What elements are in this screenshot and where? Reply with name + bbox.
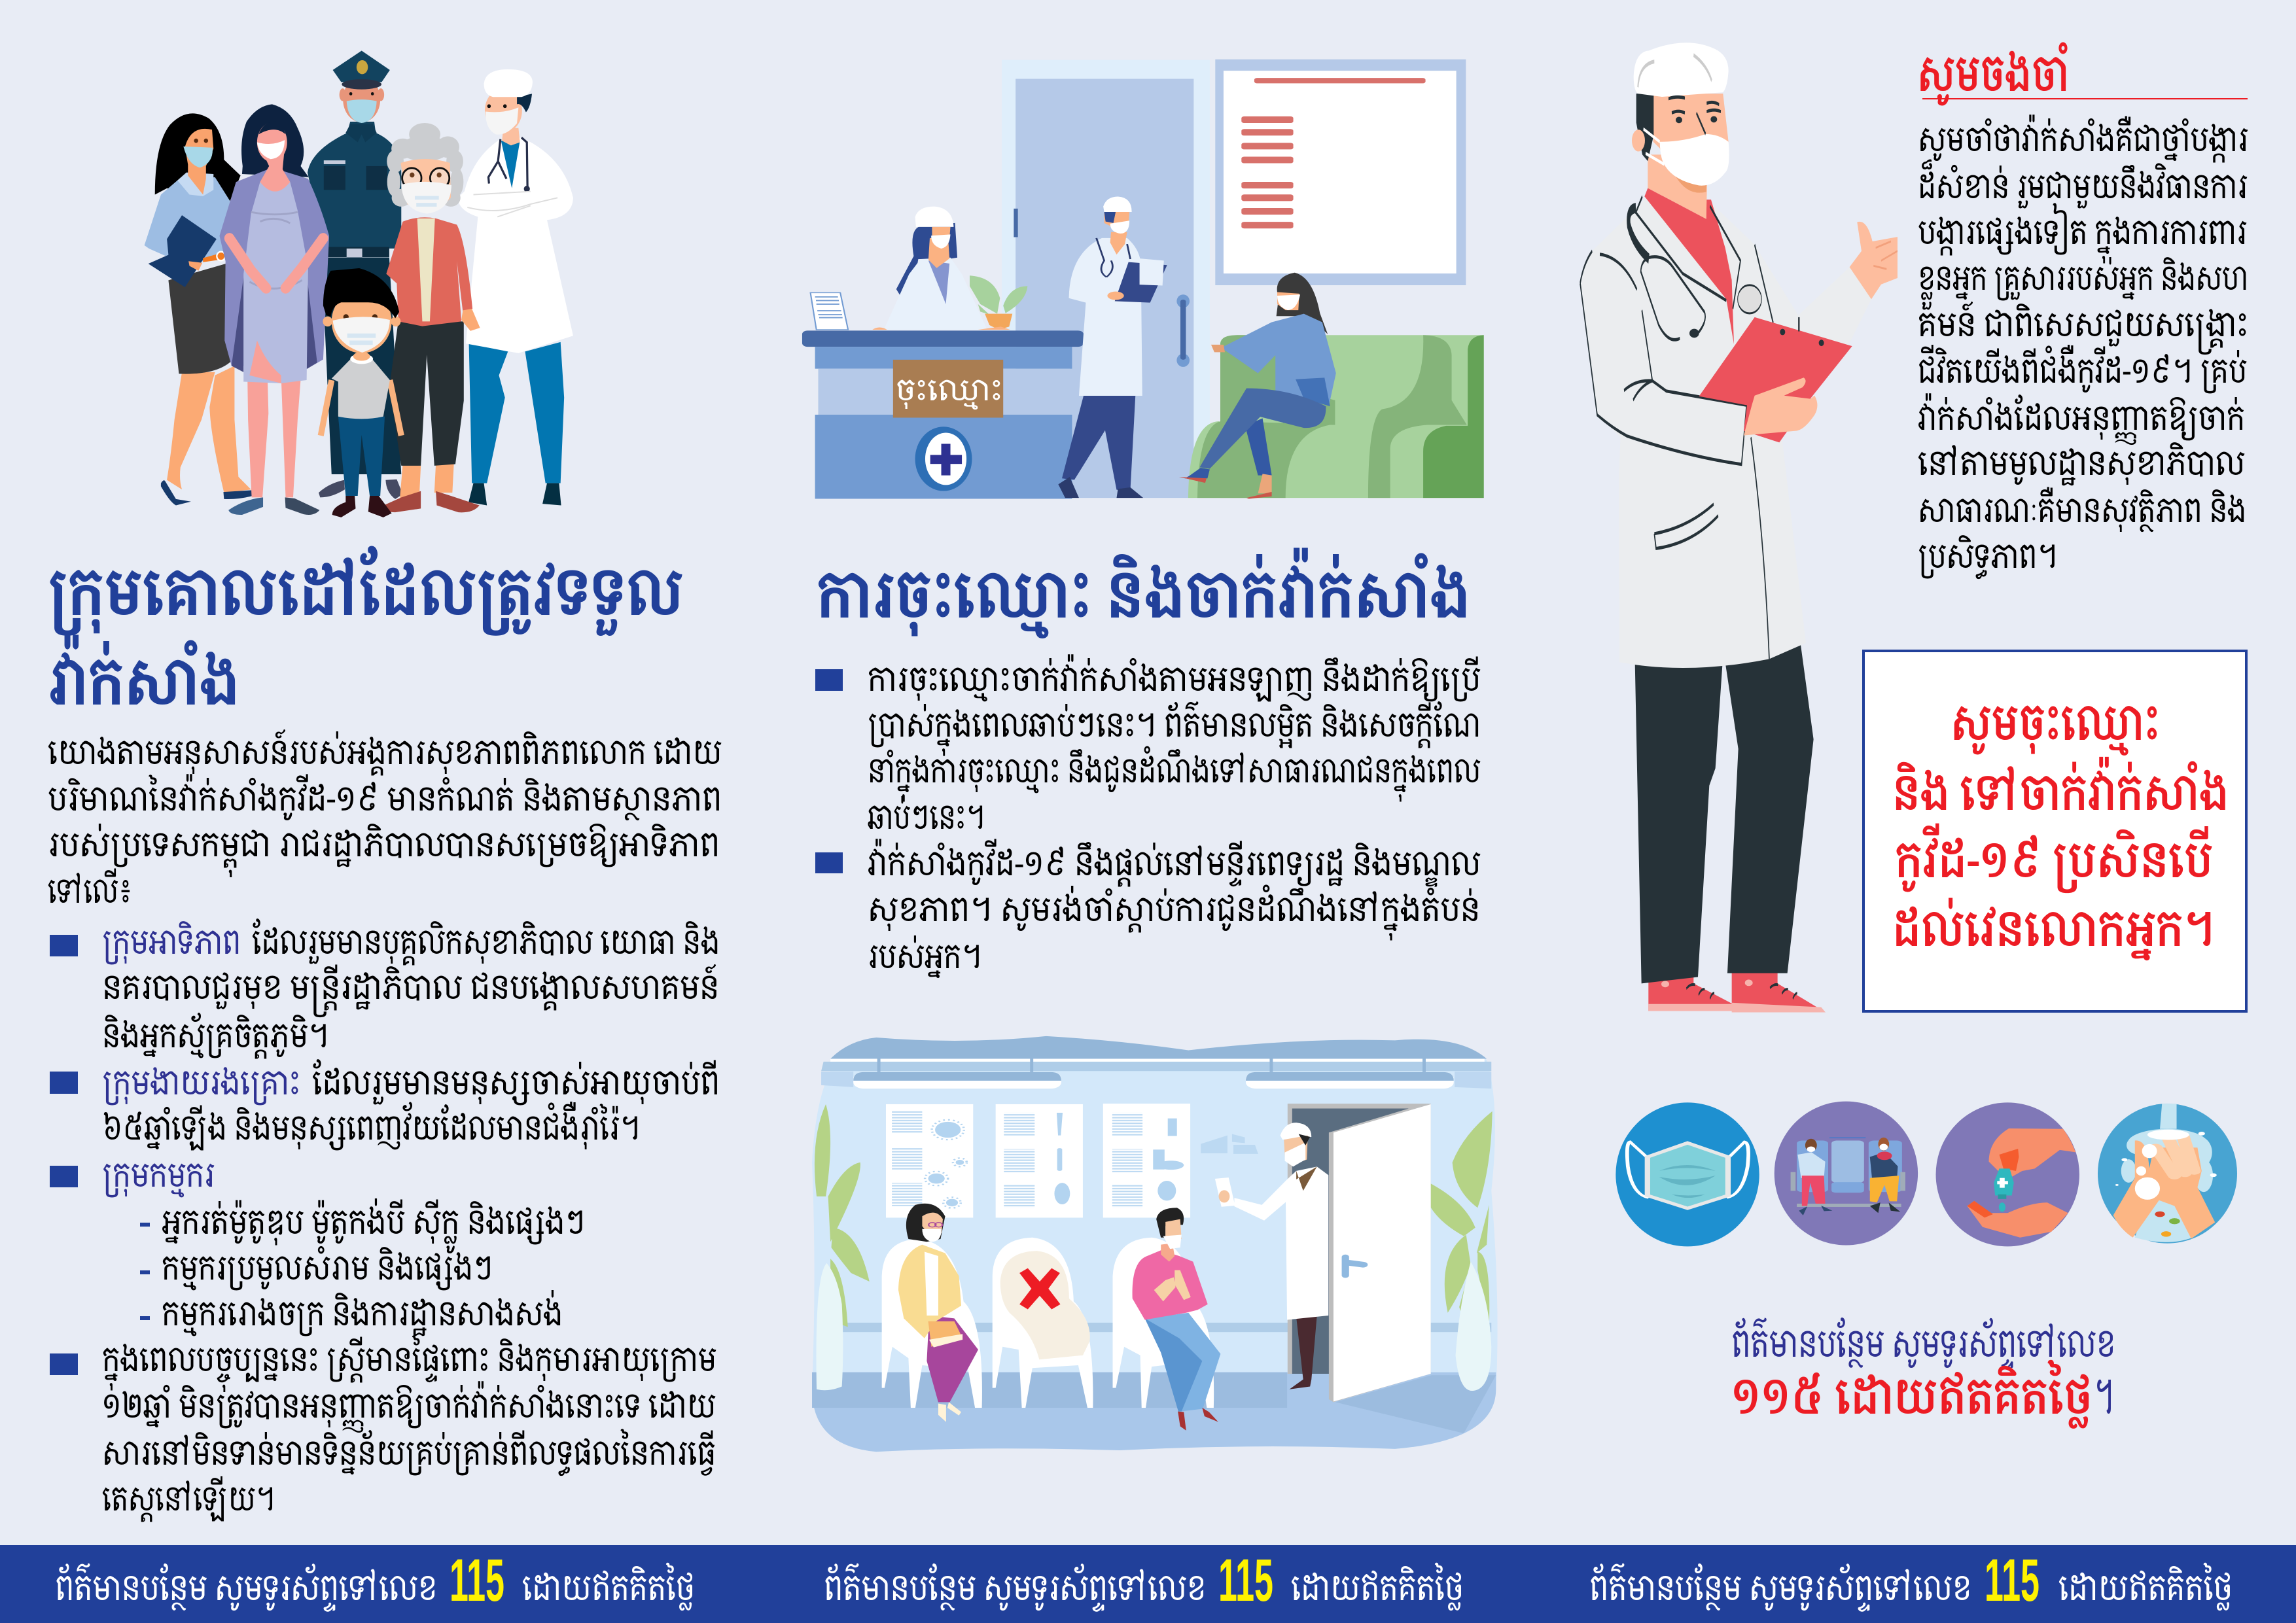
heading: target groups: ក្រុមគោលដៅដែលត្រូវទទួល	[48, 546, 684, 636]
footer message 1: ដោយឥតគិតថ្លៃ	[522, 1562, 695, 1611]
text block: intro: យោងតាមអនុសាសន៍របស់អង្គការសុខភាពពិភពលោក ដោយ	[48, 728, 722, 776]
list: registration details: ប្រាស់ក្នុងពេលឆាប់ៗនេះ។ ព័ត៌មានលម្អិត និងសេចក្តីណែ	[868, 701, 1481, 756]
list: priority groups: ក្រុមអាទិភាព	[102, 918, 241, 965]
list: registration details: វ៉ាក់សាំងកូវីដ-១៩ នឹងផ្តល់នៅមន្ទីរពេទ្យរដ្ឋ និងមណ្ឌល	[868, 839, 1481, 887]
list: priority groups: ក្នុងពេលបច្ចុប្បន្ននេះ ស្ត្រីមានផ្ទៃពោះ និងកុមារអាយុក្រោម	[102, 1335, 716, 1392]
footer bar	[0, 1545, 2296, 1623]
list: priority groups: អ្នករត់ម៉ូតូឌុប ម៉ូតូកង់បី ស៊ីក្លូ និងផ្សេងៗ	[162, 1198, 586, 1253]
list: registration details	[815, 654, 1481, 979]
illustration: waiting room	[812, 1036, 1498, 1452]
text block: more information hotline: ព័ត៌មានបន្ថែម សូមទូរស័ព្ទទៅលេខ	[1731, 1316, 2115, 1369]
footer message 2: 115	[1218, 1547, 1273, 1614]
list: priority groups: ៦៥ឆ្នាំឡើង និងមនុស្សពេញវ័យដែលមានជំងឺរ៉ាំរ៉ៃ។	[102, 1101, 641, 1151]
callout: register and get vaccinated: សូមចុះឈ្មោះ	[1951, 688, 2160, 756]
label: registration sign: ចុះឈ្មោះ	[895, 369, 1002, 410]
icons: prevention measures	[1616, 1102, 2237, 1246]
footer message 1	[55, 1547, 695, 1614]
footer message 3: ដោយឥតគិតថ្លៃ	[2058, 1562, 2233, 1611]
text block: more information hotline: ១១៥ ដោយឥតគិតថ្លៃ	[1731, 1359, 2093, 1429]
list: registration details: ឆាប់ៗនេះ។	[868, 793, 985, 839]
text block: remember: ប្រសិទ្ធភាព។	[1918, 532, 2058, 580]
icon: hand sanitizer	[1936, 1102, 2079, 1246]
list: priority groups: ១២ឆ្នាំ មិនត្រូវបានអនុញ្ញាតឱ្យចាក់វ៉ាក់សាំងនោះទេ ដោយ	[102, 1381, 716, 1433]
text block: intro	[48, 728, 722, 913]
callout: register and get vaccinated: កូវីដ-១៩ ប្រសិនបើ	[1895, 823, 2213, 894]
footer message 1: 115	[450, 1547, 504, 1614]
text block: remember	[1918, 114, 2248, 580]
list: priority groups	[50, 918, 720, 1522]
footer message 3: 115	[1985, 1547, 2040, 1614]
text block: intro: របស់ប្រទេសកម្ពុជា រាជរដ្ឋាភិបាលបានសម្រេចឱ្យអាទិភាព	[48, 820, 720, 877]
text block: remember: វ៉ាក់សាំងដែលអនុញ្ញាតឱ្យចាក់	[1918, 393, 2245, 445]
text block: intro: បរិមាណនៃវ៉ាក់សាំងកូវីដ-១៩ មានកំណត់ និងតាមស្ថានភាព	[48, 774, 722, 821]
footer message 2: ព័ត៌មានបន្ថែម សូមទូរស័ព្ទទៅលេខ	[824, 1562, 1206, 1612]
list: priority groups: កម្មកររោងចក្រ និងការដ្ឋានសាងសង់	[162, 1289, 563, 1336]
footer message 3: ព័ត៌មានបន្ថែម សូមទូរស័ព្ទទៅលេខ	[1589, 1562, 1971, 1612]
text block: remember: គមន៍ ជាពិសេសជួយសង្គ្រោះ	[1918, 300, 2248, 355]
illustration: registration desk	[802, 60, 1484, 498]
text block: more information hotline	[1731, 1316, 2115, 1429]
list: registration details: សុខភាព។ សូមរង់ចាំស្តាប់ការជូនដំណឹងនៅក្នុងតំបន់	[868, 884, 1480, 941]
list: priority groups: និងអ្នកស្ម័គ្រចិត្តភូមិ។	[102, 1011, 329, 1059]
heading: remember: សូមចងចាំ	[1917, 39, 2069, 106]
heading: target groups	[48, 546, 684, 724]
list: priority groups: តេស្តនៅឡើយ។	[102, 1475, 275, 1522]
callout: register and get vaccinated: និង ទៅចាក់វ៉ាក់សាំង	[1892, 756, 2229, 825]
text block: intro: ទៅលើ៖	[48, 867, 133, 913]
list: priority groups: នគរបាលជួរមុខ មន្ត្រីរដ្ឋាភិបាល ជនបង្គោលសហគមន៍	[102, 963, 719, 1018]
footer message 1: ព័ត៌មានបន្ថែម សូមទូរស័ព្ទទៅលេខ	[55, 1562, 437, 1612]
heading: target groups: វ៉ាក់សាំង	[48, 634, 239, 724]
list: priority groups: ក្រុមងាយរងគ្រោះ	[102, 1058, 300, 1106]
list: registration details: ការចុះឈ្មោះចាក់វ៉ាក់សាំងតាមអនឡាញ នឹងដាក់ឱ្យប្រើ	[868, 654, 1481, 702]
list: registration details: របស់អ្នក។	[868, 932, 982, 979]
illustration: doctor with clipboard	[1580, 43, 1898, 1013]
list: priority groups: កម្មករប្រមូលសំរាម និងផ្សេងៗ	[162, 1244, 493, 1291]
callout: register and get vaccinated	[1863, 651, 2246, 1011]
footer message 2	[824, 1547, 1464, 1614]
list: registration details: នាំក្នុងការចុះឈ្មោះ នឹងជូនដំណឹងទៅសាធារណជនក្នុងពេល	[868, 746, 1481, 802]
heading: registration and vaccination: ការចុះឈ្មោះ និងចាក់វ៉ាក់សាំង	[817, 547, 1470, 639]
text block: more information hotline: ។	[2094, 1361, 2114, 1429]
text block: remember: នៅតាមមូលដ្ឋានសុខាភិបាល	[1918, 439, 2245, 486]
list: priority groups: សារនៅមិនទាន់មានទិន្នន័យគ្រប់គ្រាន់ពីលទ្ធផលនៃការធ្វើ	[102, 1428, 716, 1476]
icon: seat distancing	[1775, 1102, 1918, 1246]
icon: face mask	[1616, 1102, 1759, 1246]
list: priority groups: ដែលរួមមានមនុស្សចាស់អាយុចាប់ពី	[312, 1058, 720, 1106]
illustration: priority groups people	[145, 50, 573, 517]
callout: register and get vaccinated: ដល់វេនលោកអ្នក។	[1892, 894, 2215, 961]
icon: hand washing	[2098, 1104, 2237, 1244]
footer message 2: ដោយឥតគិតថ្លៃ	[1291, 1562, 1464, 1611]
list: priority groups: ដែលរួមមានបុគ្គលិកសុខាភិបាល យោធា និង	[252, 918, 720, 966]
footer message 3	[1589, 1547, 2233, 1614]
list: priority groups: ក្រុមកម្មករ	[102, 1151, 215, 1198]
